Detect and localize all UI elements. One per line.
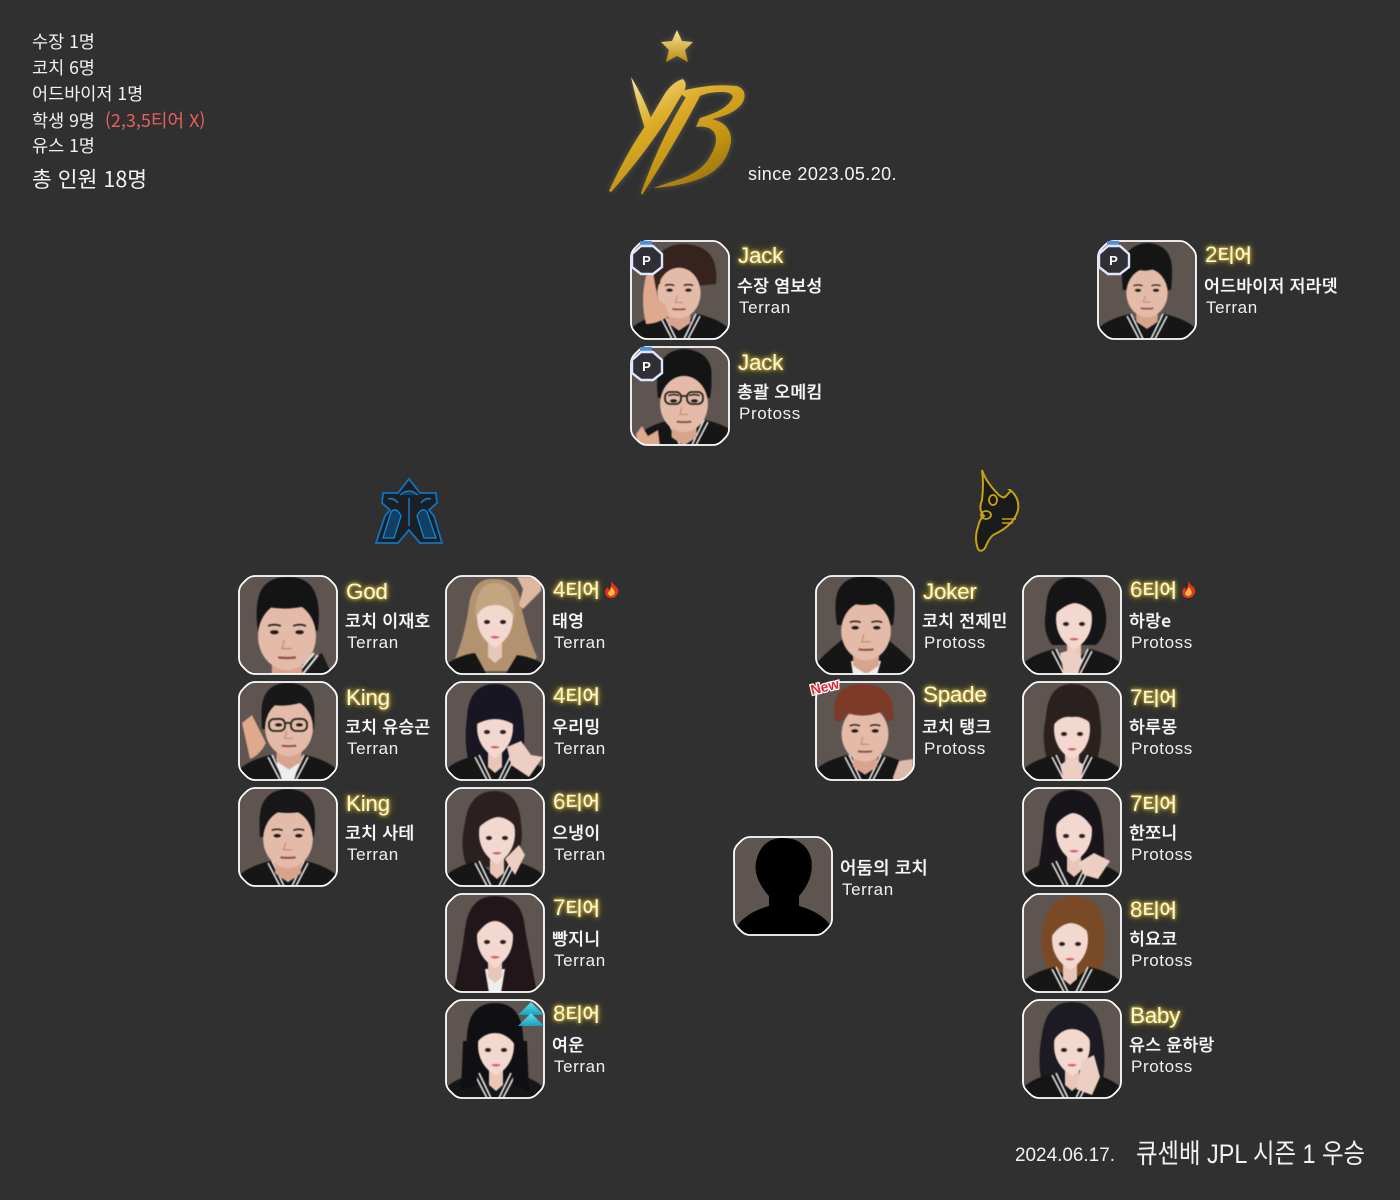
new badge: New (809, 675, 841, 698)
race: Protoss (1131, 633, 1193, 652)
coach count: 코치 6명 (32, 55, 95, 80)
race: Terran (554, 845, 606, 864)
youth count: 유스 1명 (32, 133, 95, 158)
name: 하랑e (1129, 607, 1171, 632)
role: 어둠의 코치 (840, 854, 928, 880)
race: Protoss (739, 404, 801, 423)
portrait (1022, 787, 1122, 887)
tier with fire (550, 576, 618, 603)
portrait (445, 787, 545, 887)
portrait: P (1109, 253, 1118, 268)
race: Terran (347, 739, 399, 758)
race: Protoss (1131, 739, 1193, 758)
race: Terran (554, 739, 606, 758)
name: 우리밍 (552, 713, 600, 738)
role: 코치 탱크 (922, 713, 991, 738)
name: Joker (923, 579, 977, 604)
total members: 총 인원 18명 (32, 163, 147, 194)
card: Hanjjoni (1022, 787, 1193, 887)
portrait (630, 240, 730, 340)
footer achievement (1015, 1139, 1365, 1169)
icon: star (661, 30, 693, 62)
role: 총괄 오메킴 (737, 378, 823, 403)
tier: 2티어 (1205, 241, 1252, 268)
portrait (445, 893, 545, 993)
card: Eunaengi (445, 787, 606, 887)
race: Terran (554, 1057, 606, 1076)
race: Terran (347, 633, 399, 652)
tier name: Baby (1130, 1003, 1180, 1028)
race: Protoss (1131, 1057, 1193, 1076)
role: 코치 전제민 (922, 607, 1008, 632)
student count: 학생 9명 (2,3,5티어 X) (32, 107, 205, 133)
portrait (1022, 999, 1122, 1099)
role: 어드바이저 저라뎃 (1204, 272, 1338, 297)
card: Bbangjini (445, 893, 606, 993)
silhouette portrait (733, 836, 833, 936)
card: shadow coach (733, 836, 928, 936)
race: Protoss (1131, 951, 1193, 970)
name: 히요코 (1129, 925, 1177, 950)
tier: 7티어 (1130, 684, 1177, 711)
name: King (346, 685, 390, 710)
portrait: P (642, 359, 651, 374)
YB letterform (609, 77, 745, 195)
tier: 7티어 (1130, 790, 1177, 817)
race: Terran (1206, 298, 1258, 317)
logo: YB gold emblem (608, 30, 747, 195)
role: 수장 염보성 (737, 272, 823, 297)
role: 유스 윤하랑 (1129, 1031, 1215, 1056)
card: Hiyoko (1022, 893, 1193, 993)
name: 한쪼니 (1129, 819, 1177, 844)
race: Terran (347, 845, 399, 864)
card: Yeoun (445, 999, 606, 1099)
card: Yoon Harang (1022, 999, 1215, 1099)
date: 2024.06.17. (1015, 1145, 1115, 1166)
race: Terran (554, 633, 606, 652)
card: Harumong (1022, 681, 1193, 781)
card: adviser (1097, 240, 1338, 340)
card: Woorimeng (445, 681, 606, 781)
card: King coach Yoo (238, 681, 431, 781)
role: 코치 유승곤 (345, 713, 431, 738)
name: 태영 (552, 607, 584, 632)
role: 코치 사테 (345, 819, 414, 844)
portrait (445, 999, 545, 1099)
race: Protoss (924, 739, 986, 758)
card: general manager Jack (630, 346, 823, 446)
card: Spade coach (809, 675, 991, 781)
portrait (238, 787, 338, 887)
role: 코치 이재호 (345, 607, 431, 632)
icon: Terran emblem (374, 478, 444, 544)
adviser count: 어드바이저 1명 (32, 81, 143, 106)
portrait (1097, 240, 1197, 340)
portrait: P (642, 253, 651, 268)
since date: since 2023.05.20. (748, 164, 897, 184)
name: 으냉이 (552, 819, 600, 844)
card: Taeyoung (445, 575, 618, 675)
portrait (815, 575, 915, 675)
tier: 8티어 (553, 1000, 600, 1027)
name: Jack (738, 350, 783, 375)
card: Harang (1022, 575, 1196, 675)
tier with fire: 6티어 (1130, 576, 1177, 603)
icon: double up arrow (518, 1002, 544, 1026)
tier: 6티어 (553, 788, 600, 815)
portrait (1022, 893, 1122, 993)
name: 빵지니 (552, 925, 600, 950)
portrait (1022, 575, 1122, 675)
card: captain Jack (630, 240, 823, 340)
tier with fire: 4티어 (553, 576, 600, 603)
achievement text: 큐센배 JPL 시즌 1 우승 (1136, 1139, 1365, 1169)
portrait (238, 681, 338, 781)
race: Protoss (1131, 845, 1193, 864)
name: Spade (923, 682, 987, 707)
roster summary (32, 29, 205, 194)
race: Terran (739, 298, 791, 317)
tier: 4티어 (553, 682, 600, 709)
name: 하루몽 (1129, 713, 1177, 738)
card: God coach (238, 575, 431, 675)
portrait (445, 681, 545, 781)
tier: 7티어 (553, 894, 600, 921)
name: Jack (738, 243, 783, 268)
portrait (445, 575, 545, 675)
card: Joker coach (815, 575, 1008, 675)
portrait (630, 346, 730, 446)
portrait (238, 575, 338, 675)
name: God (346, 579, 388, 604)
name: King (346, 791, 390, 816)
name: 여운 (552, 1031, 584, 1056)
card: King coach Sater (238, 787, 414, 887)
portrait (1022, 681, 1122, 781)
icon: Protoss emblem (975, 470, 1020, 552)
tier: 8티어 (1130, 896, 1177, 923)
race: Terran (554, 951, 606, 970)
race: Protoss (924, 633, 986, 652)
captain count: 수장 1명 (32, 29, 95, 54)
race: Terran (842, 880, 894, 899)
portrait (815, 681, 915, 781)
tier with fire (1126, 576, 1196, 603)
